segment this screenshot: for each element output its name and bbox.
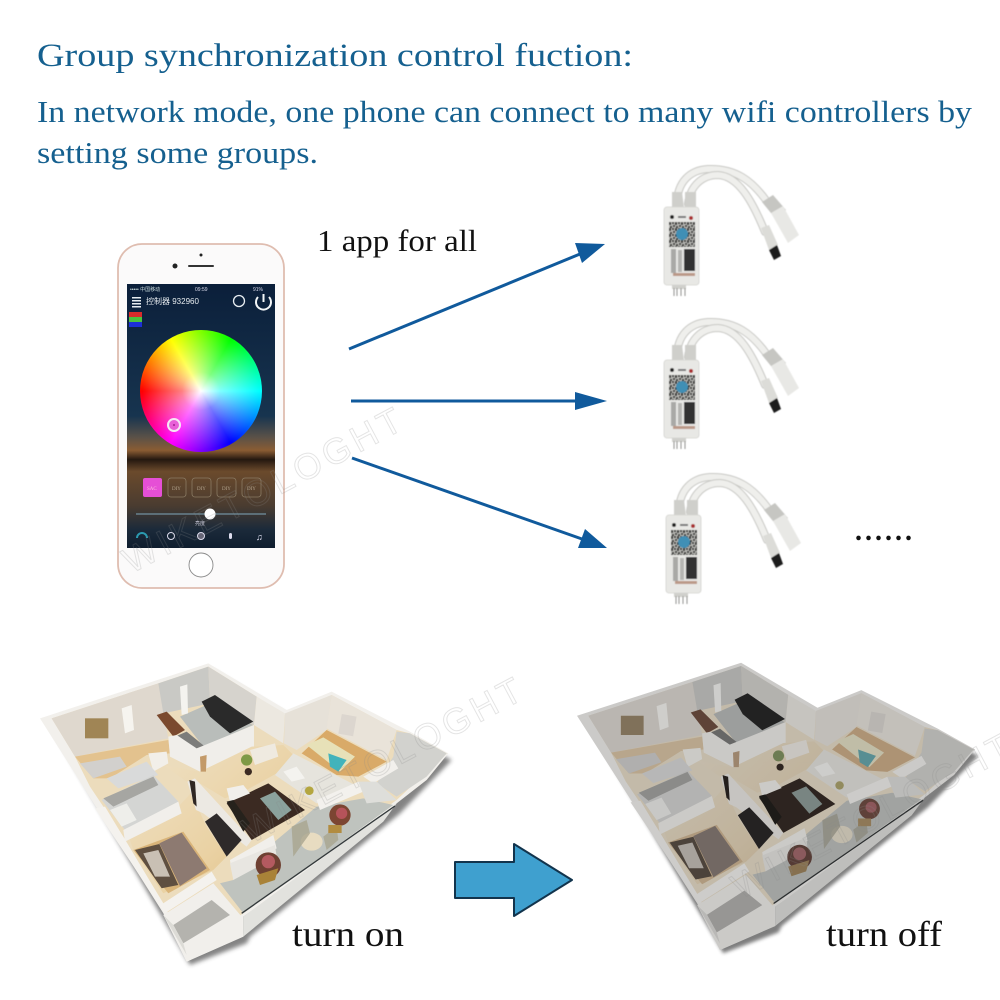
watermark on phone: WIKETOLOGHT — [116, 399, 408, 581]
mode buttons — [143, 478, 261, 497]
mode buttons: DIY — [172, 487, 181, 492]
label: turn off: turn off — [826, 914, 942, 954]
controller 1 — [664, 169, 799, 296]
arrow: to second controller — [351, 392, 607, 410]
phone — [118, 244, 284, 588]
phone screen: 91% — [253, 287, 264, 293]
house with lights off — [577, 663, 978, 953]
description text: setting some groups. — [37, 135, 318, 170]
block arrow — [455, 844, 572, 916]
phone screen: 09:59 — [195, 287, 208, 293]
label: 1 app for all: 1 app for all — [317, 223, 477, 258]
controller 2 — [664, 322, 799, 449]
watermark on first house: WIKETOLOGHT — [236, 669, 528, 851]
arrow: to first controller — [349, 243, 605, 349]
mode buttons: DIY — [247, 487, 256, 492]
tab bar icons — [137, 532, 263, 542]
arrow: to third controller — [352, 458, 607, 548]
color picker handle — [168, 419, 180, 431]
color wheel — [139, 329, 263, 453]
mode buttons: DIY — [197, 487, 206, 492]
house with lights on — [40, 663, 452, 965]
label: turn on: turn on — [292, 914, 404, 954]
phone screen: ••••• 中国移动 — [130, 286, 160, 293]
tab bar icons: ♫ — [256, 532, 263, 542]
phone screen — [127, 284, 275, 548]
mode buttons: SAC — [147, 487, 157, 492]
description text: In network mode, one phone can connect to many wifi controllers by — [37, 94, 973, 129]
controller 3 — [666, 477, 801, 604]
phone screen: 控制器 932960 — [146, 296, 199, 306]
title: Group synchronization control fuction: — [37, 38, 633, 74]
mode buttons: DIY — [222, 487, 231, 492]
ellipsis: ...... — [855, 516, 912, 547]
description text — [37, 94, 973, 170]
brightness slider — [136, 508, 266, 527]
brightness slider: 亮度 — [195, 520, 205, 527]
home button — [189, 553, 213, 577]
